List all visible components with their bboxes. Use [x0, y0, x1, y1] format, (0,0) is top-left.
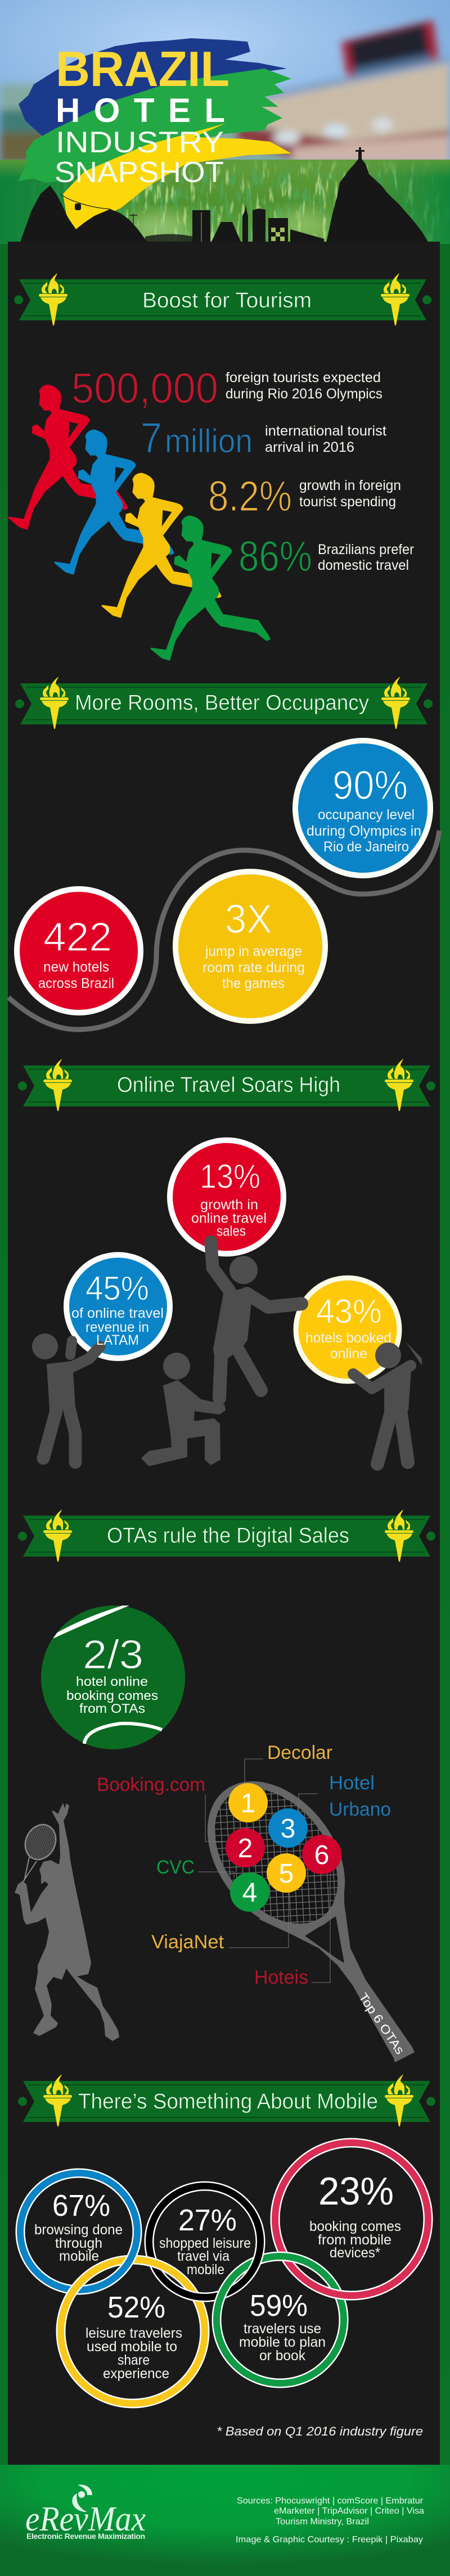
OTA labels [97, 1742, 391, 1988]
ring stat: 67% browsing [34, 2189, 123, 2264]
ring stat: 52% leisure travelers: share [118, 2352, 150, 2368]
circle: 13% online sales: sales [217, 1223, 246, 1239]
stat: 7 million arrivals: million [165, 423, 253, 460]
figure: kneeling [142, 1353, 225, 1466]
circle: 3X room rate: the games [222, 976, 285, 991]
tennis ball: 2/3 of bookings: 2/3 [83, 1632, 143, 1677]
stat: 8.2% growth [208, 473, 401, 520]
ring stat: 52% leisure travelers: 52% [107, 2291, 165, 2324]
ball 1: 1 [241, 1789, 255, 1818]
icon: torches [43, 2074, 413, 2126]
circle: 3X room rate: jump in average [205, 944, 302, 959]
circle: 45% of online revenue: of online travel [71, 1305, 164, 1321]
icon: torches [40, 677, 410, 729]
OTA labels: Decolar [267, 1742, 332, 1763]
circle: 3X room rate [176, 872, 325, 1021]
stat: 7 million arrivals: arrival in 2016 [265, 439, 354, 455]
OTA labels: Hoteis [254, 1967, 308, 1988]
circle: 422 new hotels: 422 [43, 915, 112, 960]
ring stat: 59% plan or book: travelers use [244, 2321, 321, 2337]
circle: 3X room rate: room rate during [202, 960, 305, 976]
ring stat: 23% booking: from mobile [318, 2232, 392, 2248]
ring stat: 52% leisure travelers: leisure travelers [86, 2325, 182, 2341]
figure: right [353, 1343, 422, 1464]
stat: 7 million arrivals: international tourist [265, 423, 386, 439]
small racket [20, 1820, 61, 1883]
circle: 43% hotels booked online: hotels booked [305, 1330, 392, 1346]
tennis ball: 2/3 of bookings: from OTAs [79, 1701, 145, 1716]
circle: 90% occupancy: 90% [332, 763, 408, 808]
ring stat: 67% browsing: through [55, 2235, 102, 2251]
logo: eRevMax [25, 2484, 146, 2541]
label: LATAM over figure's hand: LATAM [96, 1332, 139, 1348]
banner: Online Travel Soars High [18, 1059, 435, 1111]
banner: There's Something About Mobile [18, 2074, 435, 2126]
ball 1 [228, 1783, 268, 1822]
circle: 13% online sales [170, 1140, 284, 1254]
ring stat: 67% browsing: 67% [52, 2189, 110, 2223]
icon: torches [43, 1509, 413, 1562]
ball 5: 5 [279, 1859, 294, 1889]
icon: logo swirl [72, 2484, 92, 2512]
tennis player silhouette [15, 1803, 119, 2041]
ring stat: 23% booking: 23% [318, 2169, 394, 2213]
Olympic rings [20, 2143, 428, 2403]
OTA labels: ViajaNet [151, 1931, 224, 1953]
banner: Online Travel Soars High: Online Travel Soars High [117, 1073, 340, 1097]
banner: OTAs rule the Digital Sales [18, 1509, 435, 1562]
label: Top 6 OTAs: Top 6 OTAs [356, 1990, 407, 2057]
footer band [0, 2465, 450, 2576]
OTA labels: Hotel [329, 1772, 375, 1794]
stat: 8.2% growth: growth in foreign [299, 478, 401, 493]
icon: torches [43, 1059, 413, 1111]
ball 5 [267, 1853, 306, 1893]
brush strokes: Brazilian flag colours [18, 38, 291, 229]
stat: 8.2% growth: 8.2% [208, 473, 292, 520]
banner: Boost for Tourism [14, 273, 431, 325]
figure: centre [211, 1242, 302, 1398]
circle: 90% occupancy: Rio de Janeiro [323, 839, 409, 855]
tennis racket with top 6 OTAs [184, 1760, 415, 2062]
leader lines for OTA labels [198, 1759, 330, 1983]
header photo: stadium and grass [0, 0, 450, 244]
stat: 500,000 foreign tourists: 500,000 [71, 365, 218, 412]
stat: 86% domestic travel: 86% [238, 533, 312, 580]
circle: 43% hotels booked online [296, 1278, 399, 1381]
ring stat: 67% browsing: browsing done [34, 2222, 123, 2238]
ball 4: 4 [242, 1878, 257, 1908]
ring stat: 27% shopped: 27% [178, 2203, 237, 2237]
title: SNAPSHOT [55, 156, 224, 189]
stat: 86% domestic travel [238, 533, 414, 580]
ball 4 [230, 1872, 269, 1912]
ring stat: 59% plan or book: 59% [250, 2289, 308, 2323]
banner: There's Something About Mobile: There’s Something About Mobile [78, 2090, 378, 2114]
footnote: * Based on Q1 2016 industry figure [217, 2424, 423, 2438]
circle: 422 new hotels: new hotels [43, 959, 109, 975]
ring stat: 23% booking [309, 2169, 401, 2261]
sources and credits: eMarketer | TripAdvisor | Criteo | Visa [274, 2506, 424, 2516]
OTA labels: CVC [156, 1857, 195, 1878]
ball 6: 6 [314, 1840, 329, 1870]
sources and credits: Tourism Ministry, Brazil [276, 2517, 369, 2527]
stick figures lifting circles [32, 1242, 422, 1466]
tennis ball: 2/3 of bookings: hotel online [76, 1674, 148, 1689]
stat: 86% domestic travel: domestic travel [318, 557, 409, 573]
circle: 45% of online revenue: 45% [86, 1269, 149, 1307]
figure: left [32, 1334, 100, 1462]
ring stat: 52% leisure travelers: used mobile to [87, 2339, 177, 2355]
circle: 90% occupancy [295, 741, 430, 876]
circle: 13% online sales: 13% [200, 1158, 260, 1195]
Rio skyline silhouette [20, 147, 429, 243]
circle: 13% online sales: growth in [200, 1197, 258, 1213]
logo: eRevMax: Electronic Revenue Maximization [26, 2532, 145, 2541]
ring stat: 27% shopped: travel via [177, 2248, 230, 2264]
ball 2: 2 [238, 1834, 253, 1863]
ring stat: 27% shopped: shopped leisure [159, 2235, 251, 2251]
OTA labels: Urbano [329, 1799, 391, 1820]
stat: 500,000 foreign tourists: during Rio 2016 Olympics [226, 386, 382, 402]
ball 2 [226, 1828, 265, 1867]
ball 6 [302, 1835, 341, 1874]
circle: 3X room rate: 3X [225, 897, 272, 942]
sources and credits: Image & Graphic Courtesy : Freepik | Pixabay [236, 2535, 423, 2545]
ring stat: 59% plan or book: mobile to plan [239, 2334, 326, 2350]
banner: More Rooms, Better Occupancy: More Rooms, Better Occupancy [75, 691, 369, 715]
sources and credits: Sources: Phocuswright | comScore | Embratur [237, 2496, 424, 2506]
ring stat: 27% shopped: mobile [187, 2262, 224, 2278]
stat: 7 million arrivals [141, 414, 386, 462]
title [55, 41, 230, 189]
circle: 422 new hotels: across Brazil [38, 976, 114, 991]
circle: 43% hotels booked online: 43% [316, 1292, 382, 1330]
banner: Boost for Tourism: Boost for Tourism [142, 289, 312, 312]
stat: 8.2% growth: tourist spending [299, 494, 396, 510]
stat: 86% domestic travel: Brazilians prefer [318, 542, 414, 557]
OTA labels: Booking.com [97, 1774, 205, 1795]
banner: OTAs rule the Digital Sales: OTAs rule the Digital Sales [107, 1524, 349, 1548]
title: BRAZIL [56, 41, 230, 97]
stat: 500,000 foreign tourists [71, 365, 382, 412]
numbered OTA balls [226, 1783, 341, 1912]
circle: 90% occupancy: during Olympics in [307, 823, 421, 839]
sources and credits [236, 2496, 424, 2545]
ring stat: 27% shopped [159, 2203, 251, 2278]
circle: 422 new hotels [17, 889, 141, 1013]
title: HOTEL [56, 92, 225, 129]
ring stat: 52% leisure travelers [86, 2291, 182, 2382]
stat: 500,000 foreign tourists: foreign tourists expected [226, 370, 381, 386]
circle: 90% occupancy: occupancy level [318, 807, 415, 823]
ring stat: 23% booking: devices* [330, 2245, 380, 2261]
ball 3 [268, 1808, 308, 1848]
circle: 43% hotels booked online: online [330, 1346, 367, 1362]
icon: torches [39, 273, 410, 325]
banner: More Rooms, Better Occupancy [15, 677, 433, 729]
runners illustration [9, 386, 269, 660]
ring stat: 23% booking: booking comes [309, 2219, 401, 2234]
ring stat: 67% browsing: mobile [59, 2248, 99, 2264]
circle: 45% of online revenue [66, 1255, 170, 1358]
stat: 7 million arrivals: 7 [141, 414, 162, 462]
tennis ball: 2/3 of bookings: booking comes [66, 1688, 158, 1703]
ring stat: 59% plan or book: or book [259, 2348, 305, 2364]
circle: 13% online sales: online travel [191, 1210, 267, 1226]
title: INDUSTRY [56, 126, 224, 159]
tennis ball: 2/3 of bookings [41, 1606, 185, 1749]
winding track line [8, 831, 439, 1030]
circle: 45% of online revenue: revenue in [86, 1319, 149, 1335]
ring stat: 52% leisure travelers: experience [103, 2366, 169, 2382]
ball 3: 3 [281, 1814, 295, 1844]
logo: eRevMax: eRevMax [25, 2500, 146, 2538]
ring stat: 59% plan or book [239, 2289, 326, 2364]
